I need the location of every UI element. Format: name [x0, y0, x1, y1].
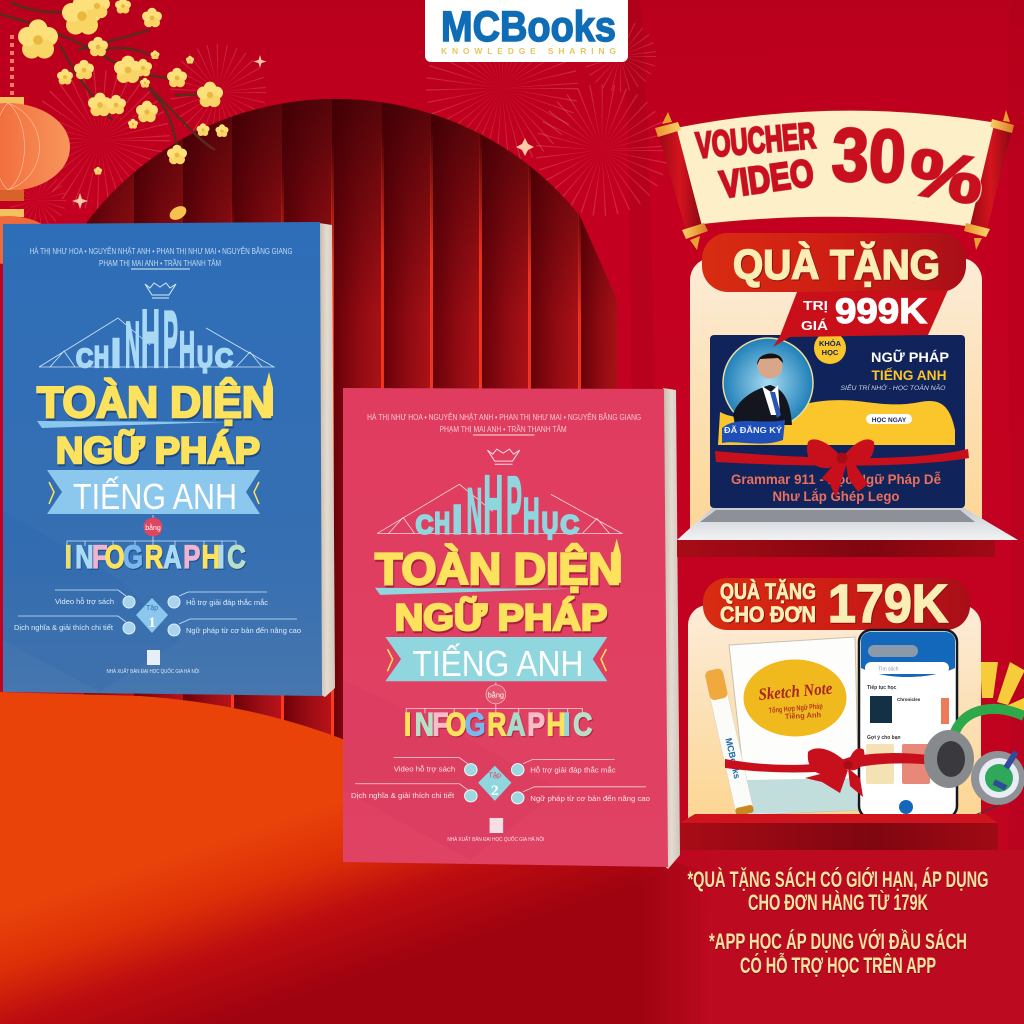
- registered badge: [722, 420, 785, 444]
- book 2 infographic word: F: [432, 707, 449, 743]
- book 2 feature labels: Ngữ pháp từ cơ bản đến nâng cao: [530, 794, 650, 803]
- book 2 title: toan dien: TOÀN DIỆN: [375, 544, 621, 594]
- book 2 infographic word: I: [563, 707, 571, 743]
- headphone cup left: [924, 730, 974, 788]
- book 2 title: chinh phuc: C: [416, 510, 433, 539]
- book 1 title: chinh phuc: I: [111, 330, 121, 376]
- book 2 page block: [663, 388, 680, 869]
- book 1 page block: [319, 223, 335, 697]
- book 1 infographic word: I: [218, 540, 225, 576]
- book 2 infographic word: G: [465, 707, 486, 743]
- book 1 title underline: [37, 421, 225, 428]
- book 1 connector lines: [67, 515, 236, 552]
- course caption: Grammar 911 - Học Ngữ Pháp Dễ: [731, 471, 941, 487]
- book 2 title underline: [375, 588, 571, 595]
- tri gia price tag: TRỊ: [803, 298, 828, 313]
- laptop screen: [710, 335, 965, 508]
- gift pill 179k: QUÀ TẶNG: [720, 579, 816, 604]
- book 2 decoration: [343, 680, 560, 860]
- book 1 infographic word: P: [183, 540, 200, 576]
- voucher scroll: [655, 110, 1014, 250]
- right side backdrop blend: [640, 850, 1024, 1024]
- discount 30: 30: [830, 112, 907, 199]
- book 2 publisher logo: [490, 818, 503, 833]
- book 2 infographic word: C: [573, 707, 592, 743]
- book 1 infographic word: A: [163, 540, 182, 576]
- book 2 authors: HÀ THỊ NHƯ HOA • NGUYỄN NHẬT ANH • PHAN THỊ NHƯ MAI • NGUYỄN BẰNG GIANG: [367, 411, 641, 422]
- book 2 title: chinh phuc: H: [434, 506, 450, 540]
- sketch note booklet: Tiếng Anh: [785, 710, 822, 721]
- book 2 infographic word: I: [404, 707, 411, 743]
- book 2 title: chinh phuc: I: [452, 496, 462, 542]
- ribbon and bow on laptop: [715, 439, 969, 498]
- book 2 title: chinh phuc: P: [506, 460, 522, 551]
- laptop: [677, 332, 1018, 540]
- continue learning section: Tiếp tục học: [867, 684, 897, 691]
- fireworks: [24, 38, 638, 214]
- book 2 volume diamond: [478, 766, 511, 801]
- pedestal 2: [680, 814, 998, 850]
- book 2 ribbon: [385, 637, 607, 681]
- book 1 infographic word: G: [123, 540, 143, 576]
- book 2 feature bullets: [465, 764, 524, 804]
- course title: NGỮ PHÁP: [871, 348, 949, 365]
- book 1 crown: [131, 269, 190, 298]
- sun rays: [980, 662, 1024, 712]
- terms note 2: [709, 929, 967, 978]
- book 2 subtitle: TIẾNG ANH: [412, 644, 583, 684]
- book 1 title: chinh phuc: H: [141, 292, 160, 385]
- lantern: [0, 35, 70, 264]
- hoc ngay button: [866, 414, 912, 424]
- book 1 feature labels: [14, 597, 301, 635]
- discount percent sign: %: [904, 134, 988, 218]
- book 2 bang badge: bằng: [488, 690, 504, 699]
- book 1 title: chinh phuc: Ụ: [197, 341, 213, 374]
- book 1 title: ngu phap: NGỮ PHÁP: [56, 429, 260, 471]
- laptop base: [677, 508, 1018, 540]
- ribbon and bow on gifts: [725, 748, 950, 797]
- book 1 title: chinh phuc: C: [215, 343, 233, 373]
- book 1 title: toan dien: TOÀN DIỆN: [37, 377, 273, 427]
- book 1 infographic word: O: [105, 540, 125, 576]
- book 2 infographic word: R: [487, 707, 507, 743]
- book 1 clock tower: [265, 372, 273, 416]
- gift panel 1 background: [690, 258, 982, 540]
- book 2 authors: PHẠM THỊ MAI ANH • TRẦN THANH TÂM: [440, 424, 567, 434]
- video text: VIDEO: [717, 152, 816, 207]
- book 1 feature labels: Dịch nghĩa & giải thích chi tiết: [14, 623, 114, 632]
- right curtain folds: [622, 0, 1024, 1024]
- logo: MCBooks: [441, 3, 616, 51]
- headphone cable: [900, 805, 1000, 833]
- book 1 infographic word: H: [202, 540, 220, 576]
- course caption: [731, 471, 941, 504]
- book 2 infographic word: N: [415, 707, 434, 743]
- continue learning section: Chronicles: [897, 697, 921, 702]
- book 1 title: chinh phuc: C: [76, 343, 93, 373]
- headphones: [900, 709, 1024, 833]
- course badge: [814, 332, 846, 364]
- book 1 ribbon: [47, 470, 260, 514]
- phone body: [859, 630, 957, 818]
- gift pill 179k: 179K: [828, 574, 948, 634]
- book 2 feature labels: [351, 765, 650, 803]
- headband: [955, 709, 1024, 732]
- book 2 clock tower: [613, 539, 621, 583]
- profile pill: [868, 645, 918, 657]
- arched curtain: [84, 98, 617, 740]
- tri gia price tag: GIÁ: [801, 318, 829, 333]
- book 1 authors: HÀ THỊ NHƯ HOA • NGUYỄN NHẬT ANH • PHAN THỊ NHƯ MAI • NGUYỄN BẰNG GIANG: [30, 247, 292, 256]
- marker pen: MCBooks: [723, 737, 742, 780]
- course badge: HỌC: [822, 348, 839, 357]
- sketch note booklet: [729, 637, 859, 815]
- logo: [425, 0, 628, 62]
- book 2 bang badge: [486, 685, 506, 704]
- terms note 1: CHO ĐƠN HÀNG TỪ 179K: [748, 890, 928, 915]
- course title: TIẾNG ANH: [872, 367, 946, 383]
- book 1 feature lines: [18, 590, 297, 624]
- book 2 ribbon chevrons: [387, 649, 606, 671]
- book 2 infographic word: A: [506, 707, 526, 743]
- book 1 publisher: NHÀ XUẤT BẢN ĐẠI HỌC QUỐC GIA HÀ NỘI: [106, 668, 200, 675]
- book 2 cover: [343, 388, 668, 867]
- instructor photo: [723, 338, 813, 428]
- headphone cup right: [971, 751, 1024, 805]
- course title: SIÊU TRÍ NHỚ - HỌC TOÀN NÃO: [840, 384, 946, 392]
- marker pen: [704, 668, 754, 816]
- book 1 ribbon chevrons: [49, 482, 259, 504]
- book 1 volume diamond: [136, 598, 168, 633]
- sketch note booklet: Tổng Hợp Ngữ Pháp: [768, 701, 823, 715]
- book 2 title: chinh phuc: N: [467, 476, 482, 548]
- book 1 feature labels: Ngữ pháp từ cơ bản đến nâng cao: [186, 626, 301, 635]
- qua tang pill: [702, 233, 966, 292]
- book 1 authors: PHẠM THỊ MAI ANH • TRẦN THANH TÂM: [99, 258, 221, 268]
- book 2 mountain lines: [377, 484, 622, 534]
- book 1 title: chinh phuc: [76, 292, 233, 385]
- book 2 title: chinh phuc: H: [523, 488, 540, 545]
- scroll paper: [672, 110, 996, 228]
- book 2 title: ngu phap: NGỮ PHÁP: [395, 596, 607, 639]
- book 1 infographic word: I: [65, 540, 72, 576]
- book 2 publisher: NHÀ XUẤT BẢN ĐẠI HỌC QUỐC GIA HÀ NỘI: [447, 836, 544, 843]
- voucher text: VOUCHER: [694, 115, 817, 166]
- book 1 decoration: [3, 510, 180, 692]
- sketch note booklet: Sketch Note: [758, 679, 833, 704]
- book 1 volume diamond: 1: [148, 615, 156, 631]
- scroll right roller: [964, 110, 1014, 250]
- book 1 title: chinh phuc: H: [179, 321, 195, 378]
- pedestal 1: [677, 540, 995, 557]
- course title: [840, 348, 949, 392]
- book 1 title: chinh phuc: N: [125, 308, 140, 381]
- book 1 cover: [3, 222, 322, 696]
- hoc ngay button: HỌC NGAY: [872, 417, 907, 424]
- book 2 feature labels: Hỗ trợ giải đáp thắc mắc: [530, 766, 616, 775]
- book 1 mountain lines: [39, 318, 274, 367]
- book 2 volume diamond: Tập: [489, 772, 501, 780]
- book 1 infographic word: R: [145, 540, 163, 576]
- app header: [861, 632, 955, 677]
- book 2 title: chinh phuc: H: [483, 459, 503, 552]
- course caption: Như Lắp Ghép Lego: [772, 487, 900, 504]
- gift pill 179k: [703, 574, 970, 634]
- terms note 1: [688, 867, 988, 915]
- book 1 title: chinh phuc: H: [94, 341, 109, 374]
- book 1 authors: [30, 247, 292, 268]
- logo: KNOWLEDGE SHARING: [441, 46, 616, 56]
- book 2 infographic word: H: [546, 707, 566, 743]
- laptop keyboard: [700, 510, 975, 522]
- registered badge: ĐÃ ĐĂNG KÝ: [724, 426, 783, 435]
- book 1 publisher logo: [147, 650, 160, 665]
- book 1 infographic word: N: [75, 540, 94, 576]
- book 1 bang badge: [144, 518, 162, 536]
- book 2 infographic word: O: [446, 707, 466, 743]
- search box: [865, 662, 949, 674]
- tri gia price tag: [773, 290, 948, 347]
- suggestions section: Gợi ý cho bạn: [867, 735, 901, 741]
- qua tang pill: QUÀ TẶNG: [733, 241, 940, 288]
- apricot blossom branch: [0, 0, 228, 223]
- book 2 crown: [473, 435, 534, 464]
- book 2 feature lines: [355, 758, 646, 792]
- book 1 infographic word: C: [227, 540, 246, 576]
- book 1 bang badge: bằng: [145, 523, 161, 532]
- book 1 feature bullets: [123, 596, 180, 636]
- book: volume 1: [3, 222, 335, 697]
- book 2 connector lines: [406, 682, 582, 719]
- search box: Tìm sách: [878, 666, 899, 672]
- course badge: KHÓA: [819, 339, 842, 348]
- phone with app: [859, 630, 957, 818]
- gift pill 179k: CHO ĐƠN: [720, 602, 816, 627]
- scroll left roller: [655, 112, 708, 250]
- book 2 feature labels: Dịch nghĩa & giải thích chi tiết: [351, 791, 455, 800]
- stage floor: [0, 692, 700, 1024]
- continue learning section: [867, 684, 949, 724]
- yellow wave: [718, 400, 955, 445]
- suggestions section: [866, 735, 930, 784]
- book 2 title: chinh phuc: Ụ: [542, 506, 558, 540]
- book 2 authors: [367, 411, 641, 434]
- tri gia price tag: 999K: [835, 292, 927, 331]
- book: volume 2: [343, 388, 680, 869]
- book 1 title: chinh phuc: P: [163, 295, 178, 385]
- book 2 infographic word: P: [527, 707, 545, 743]
- book 1 infographic word: F: [92, 540, 108, 576]
- book 1 volume diamond: Tập: [146, 605, 158, 612]
- gift panel 2 background: [688, 605, 981, 822]
- book 1 subtitle: TIẾNG ANH: [73, 476, 237, 517]
- book 2 title: chinh phuc: C: [560, 510, 579, 539]
- book 1 feature labels: Video hỗ trợ sách: [55, 597, 114, 606]
- book 2 volume diamond: 2: [491, 782, 499, 799]
- app nav button: [899, 800, 913, 814]
- book 2 title: chinh phuc: [416, 459, 579, 552]
- book 2 feature labels: Video hỗ trợ sách: [394, 765, 455, 774]
- book 1 feature labels: Hỗ trợ giải đáp thắc mắc: [186, 598, 268, 607]
- book 2 content: [351, 411, 650, 843]
